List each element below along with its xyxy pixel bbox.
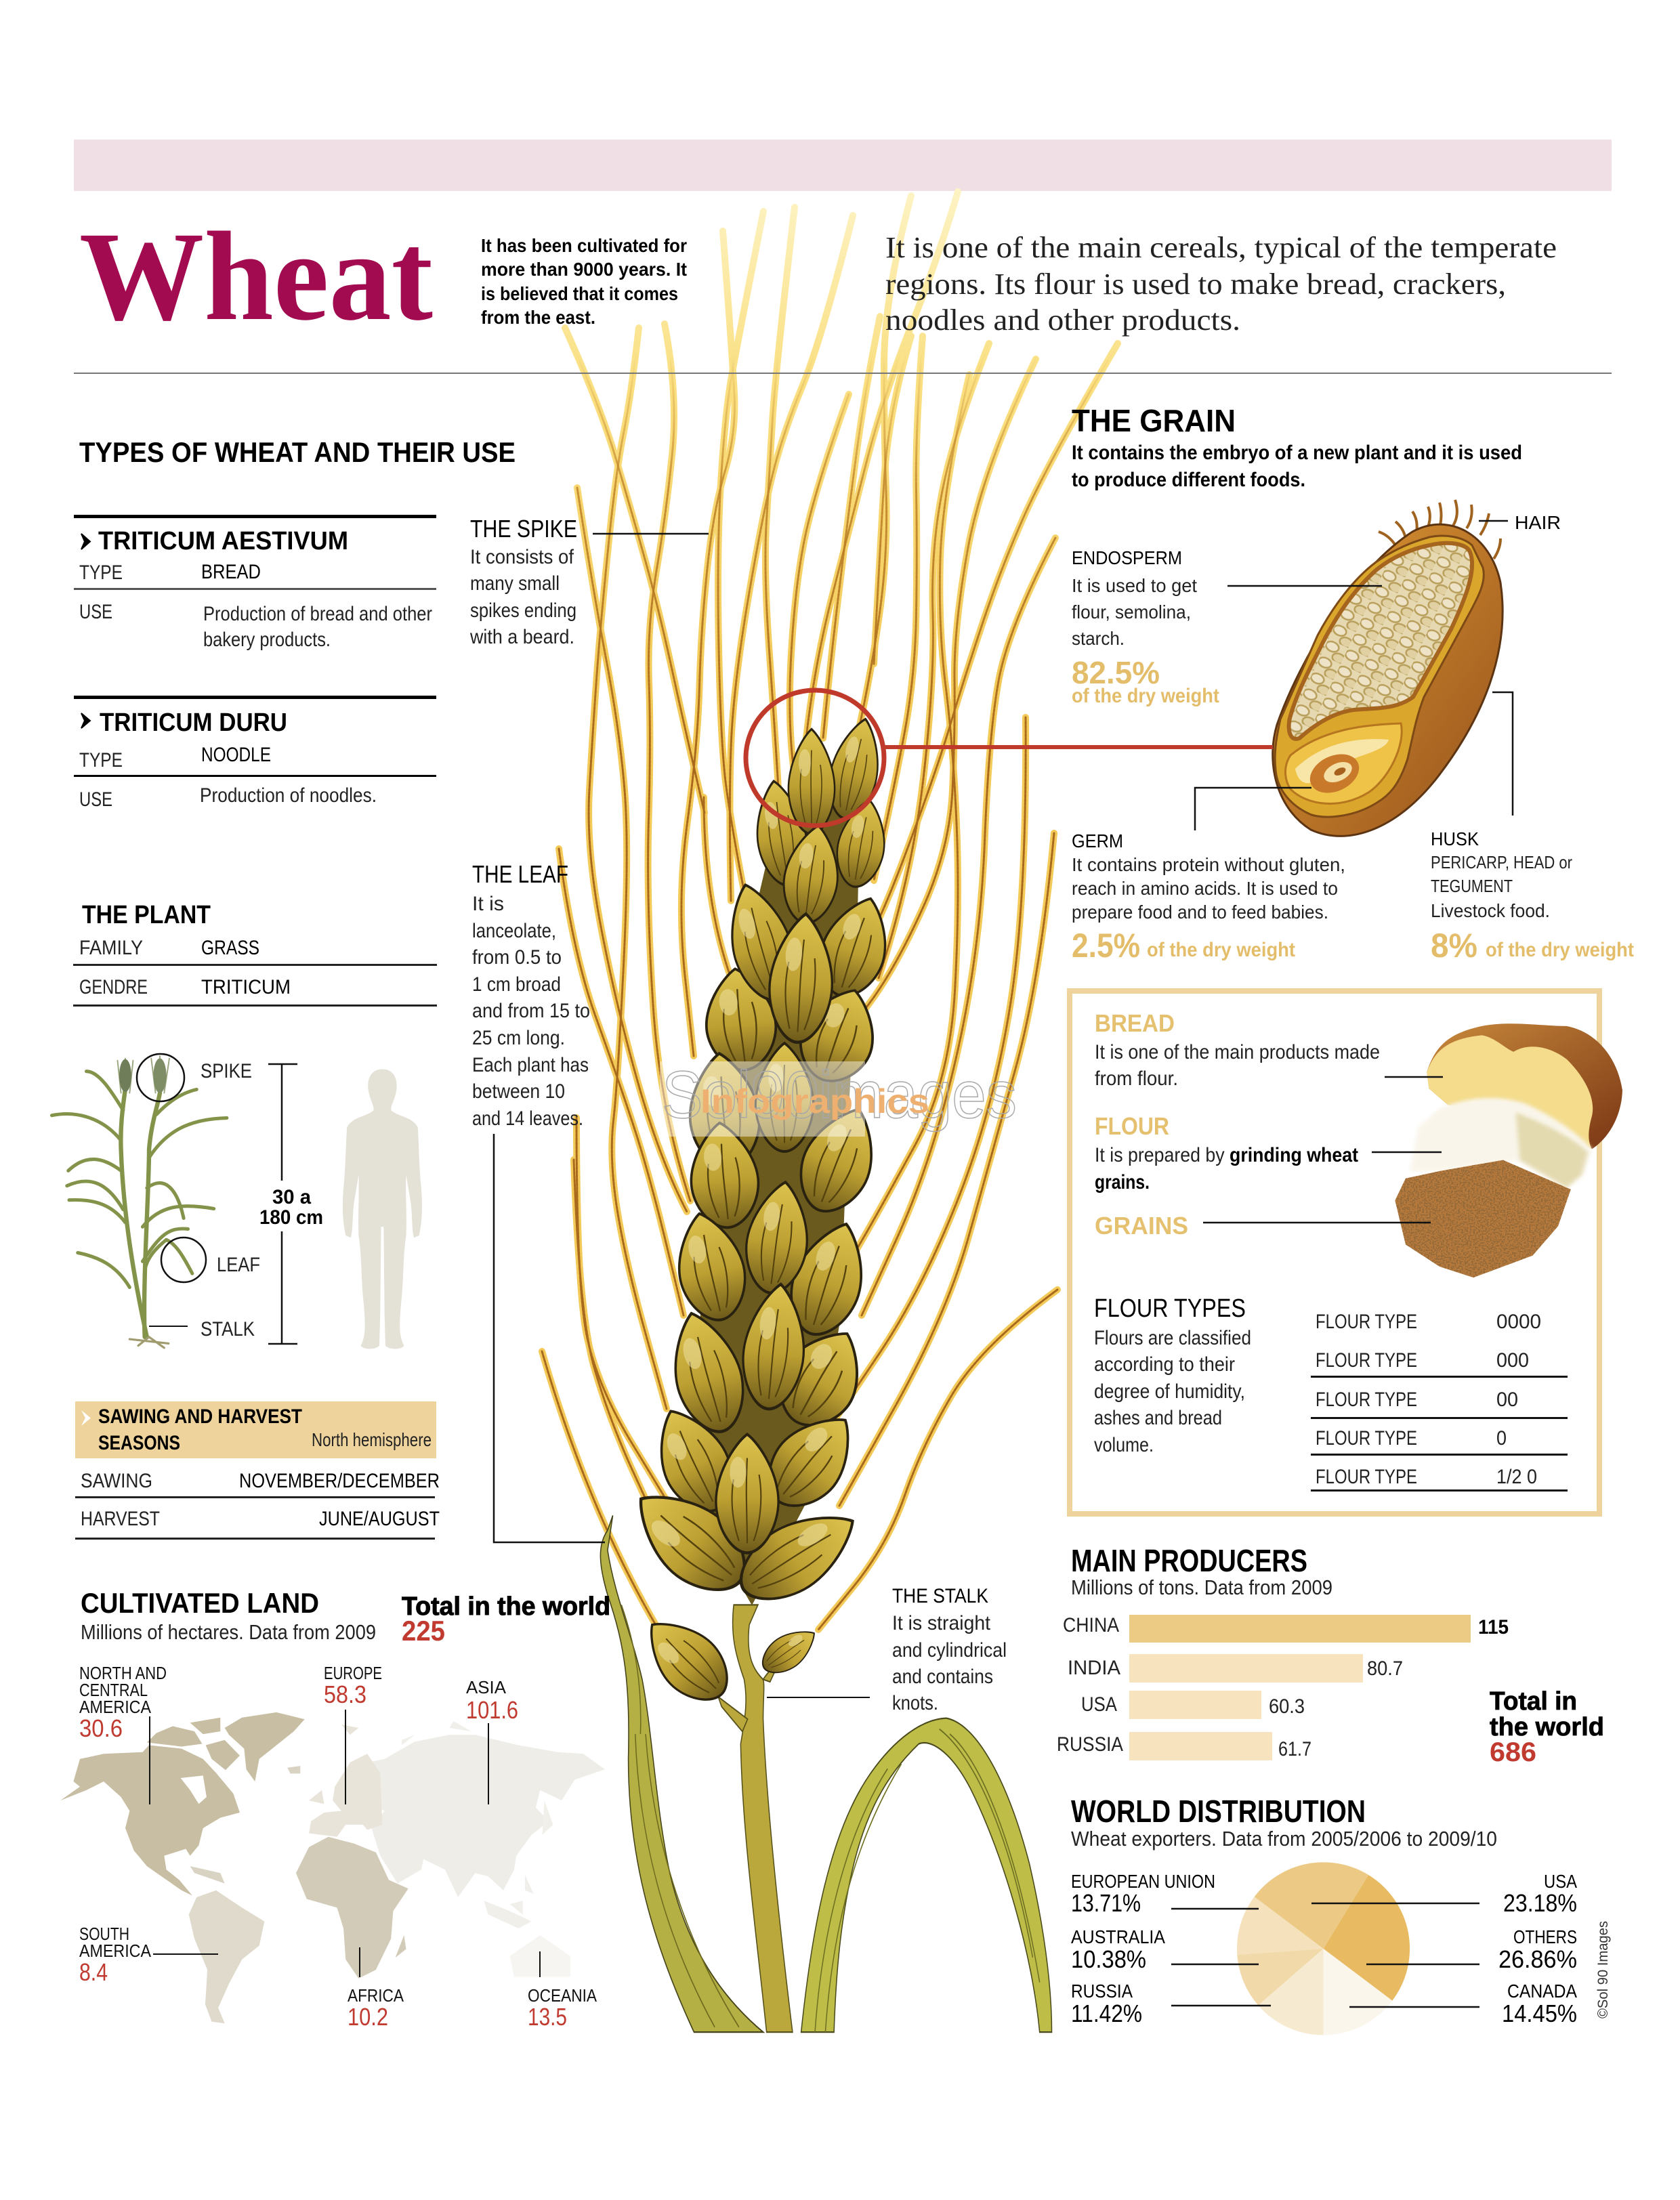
left leaf <box>600 1515 763 2032</box>
label: the spike: spikes ending <box>470 599 576 622</box>
stalk <box>718 1605 793 2032</box>
panel: types of wheat: Production of bread and other <box>203 603 432 625</box>
intro: description: regions. Its flour is used to make bread, crackers, <box>885 268 1506 301</box>
label: russia <box>1071 1981 1142 2027</box>
hair label <box>1479 512 1561 533</box>
total callout: 686 <box>1490 1737 1536 1767</box>
label: north america: NORTH AND <box>79 1663 167 1683</box>
label: the stalk: It is straight <box>892 1612 991 1634</box>
label: asia: ASIA <box>466 1677 507 1697</box>
panel: sawing and harvest seasons: SAWING <box>81 1470 152 1492</box>
panel: main producers <box>1057 1543 1604 1767</box>
husk label: Livestock food. <box>1431 900 1550 921</box>
germ label: GERM <box>1072 830 1123 851</box>
heading: THE PLANT <box>82 901 211 929</box>
intro: description: noodles and other products. <box>885 303 1240 337</box>
bread text <box>1095 1009 1443 1090</box>
label: the spike: THE SPIKE <box>470 515 577 543</box>
flour types text: ashes and bread <box>1094 1407 1222 1429</box>
flour types text: degree of humidity, <box>1094 1380 1245 1403</box>
panel: the plant: STALK <box>201 1318 255 1340</box>
label: europe: 58.3 <box>324 1680 366 1708</box>
flour types table: FLOUR TYPE <box>1316 1349 1417 1372</box>
label: the leaf <box>472 860 605 1542</box>
bar: usa: USA <box>1081 1693 1117 1716</box>
bread text: BREAD <box>1095 1009 1175 1037</box>
endosperm label: ENDOSPERM <box>1072 547 1182 568</box>
flour types table: FLOUR TYPE <box>1316 1466 1417 1488</box>
bread text: from flour. <box>1095 1067 1178 1090</box>
label: the stalk: THE STALK <box>892 1585 988 1607</box>
label: russia: 11.42% <box>1071 2000 1142 2027</box>
label: others: OTHERS <box>1513 1926 1577 1947</box>
label: europe <box>324 1663 382 1708</box>
panel: types of wheat: Production of noodles. <box>200 784 377 807</box>
panel: types of wheat: TYPE <box>79 749 123 771</box>
bar: russia <box>1057 1732 1311 1760</box>
label: asia <box>466 1677 518 1724</box>
panel: sawing and harvest seasons: JUNE/AUGUST <box>319 1508 440 1530</box>
label: africa: 10.2 <box>348 2003 388 2031</box>
label: the spike: It consists of <box>470 546 574 568</box>
germ label: 2.5% <box>1072 927 1140 965</box>
map leaders <box>150 1710 540 1977</box>
label: north america: 30.6 <box>79 1714 123 1742</box>
husk label: PERICARP, HEAD or <box>1431 852 1572 872</box>
panel: types of wheat: USE <box>79 788 112 811</box>
total callout: Total in the world <box>402 1592 610 1621</box>
total callout: the world <box>1490 1713 1604 1741</box>
label: russia: RUSSIA <box>1071 1981 1133 2002</box>
flour types table: 0000 <box>1496 1311 1541 1333</box>
grains text: GRAINS <box>1095 1212 1188 1240</box>
heading: CULTIVATED LAND <box>81 1587 319 1619</box>
panel: the plant: FAMILY <box>79 937 143 959</box>
label: africa: AFRICA <box>348 1985 404 2006</box>
watermark: Infographics <box>700 1082 929 1120</box>
panel: sawing and harvest seasons: NOVEMBER/DECEMBER <box>239 1470 440 1492</box>
bread text: It is one of the main products made <box>1095 1041 1380 1063</box>
label: others: 26.86% <box>1498 1945 1577 1973</box>
flour text: FLOUR <box>1095 1112 1169 1140</box>
bar: india: INDIA <box>1068 1657 1120 1679</box>
label: north america: AMERICA <box>79 1697 152 1717</box>
label: africa <box>348 1985 404 2031</box>
flour types table <box>1311 1311 1568 1492</box>
heading: MAIN PRODUCERS <box>1071 1543 1307 1578</box>
heading: WORLD DISTRIBUTION <box>1071 1794 1366 1829</box>
germ label: of the dry weight <box>1147 939 1295 961</box>
flour text <box>1095 1112 1442 1193</box>
panel: types of wheat: TYPE <box>79 562 123 584</box>
flour types table: 1/2 0 <box>1496 1466 1537 1488</box>
panel: world distribution <box>1071 1794 1577 2035</box>
world map <box>60 1712 605 2023</box>
panel: the grain: to produce different foods. <box>1072 469 1305 491</box>
endosperm label: of the dry weight <box>1072 685 1219 707</box>
label: the leaf: and from 15 to <box>472 1000 590 1022</box>
label: the spike: with a beard. <box>469 626 574 648</box>
total callout: 225 <box>402 1615 445 1647</box>
panel: the grain <box>1072 403 1634 965</box>
panel: sawing and harvest seasons: HARVEST <box>81 1508 160 1530</box>
intro: history: more than 9000 years. It <box>481 259 687 280</box>
flour text: It is prepared by grinding wheat <box>1095 1144 1358 1166</box>
label: the leaf: and 14 leaves. <box>472 1107 583 1130</box>
label: the leaf: 1 cm broad <box>472 973 561 996</box>
panel: types of wheat <box>74 436 516 811</box>
panel: the plant: GRASS <box>201 937 259 959</box>
label: the leaf: from 0.5 to <box>472 946 562 969</box>
bar: usa <box>1081 1691 1305 1719</box>
bar: russia: RUSSIA <box>1057 1733 1123 1756</box>
panel: types of wheat: USE <box>79 601 112 623</box>
panel: sawing and harvest seasons: SAWING AND HARVEST <box>98 1405 302 1428</box>
endosperm label: starch. <box>1072 628 1125 649</box>
right leaf <box>801 1718 1052 2032</box>
panel: world distribution: Wheat exporters. Data from 2005/2006 to 2009/10 <box>1071 1827 1497 1850</box>
height scale <box>259 1064 323 1344</box>
germ label: prepare food and to feed babies. <box>1072 902 1328 923</box>
endosperm label: 82.5% <box>1072 655 1160 690</box>
spikelets <box>618 715 900 1714</box>
label: north america <box>79 1663 167 1742</box>
panel: main producers: Millions of tons. Data from 2009 <box>1071 1575 1332 1599</box>
label: european union: 13.71% <box>1071 1889 1141 1917</box>
panel: types of wheat: bakery products. <box>203 629 331 651</box>
label: europe: EUROPE <box>324 1663 382 1683</box>
flour types table: 000 <box>1496 1349 1529 1372</box>
chevron <box>81 534 90 549</box>
panel: cultivated land <box>60 1587 610 2031</box>
title: Wheat <box>79 205 433 347</box>
label: the stalk <box>767 1585 1007 1714</box>
flour types text: according to their <box>1094 1353 1235 1376</box>
label: canada: CANADA <box>1507 1981 1577 2002</box>
label: oceania: 13.5 <box>528 2003 567 2031</box>
bar: china: CHINA <box>1063 1614 1119 1636</box>
panel: types of wheat: BREAD <box>201 561 261 583</box>
husk label: 8% <box>1431 927 1477 965</box>
flour types table: 00 <box>1496 1389 1518 1411</box>
label: usa <box>1503 1871 1577 1917</box>
label: oceania: OCEANIA <box>528 1985 597 2006</box>
panel: the plant: TRITICUM <box>201 976 291 998</box>
label: the leaf: between 10 <box>472 1080 565 1103</box>
flour text: grains. <box>1095 1171 1150 1193</box>
label: south america <box>79 1924 152 1986</box>
panel: types of wheat: NOODLE <box>201 744 271 766</box>
label: south america: AMERICA <box>79 1941 152 1961</box>
panel: the plant: GENDRE <box>79 976 148 998</box>
label: the leaf: lanceolate, <box>472 920 556 942</box>
awns <box>542 192 1118 1630</box>
bar: russia: 61.7 <box>1278 1738 1311 1760</box>
label: australia <box>1071 1926 1165 1973</box>
chevron <box>81 1410 91 1426</box>
label: south america: SOUTH <box>79 1924 129 1944</box>
label: the stalk: and contains <box>892 1666 993 1688</box>
label: canada: 14.45% <box>1502 2000 1577 2027</box>
spike body <box>698 779 860 1605</box>
panel: bread, flour, grains and flour types <box>1070 991 1622 1514</box>
triticum duru: TRITICUM DURU <box>100 708 287 737</box>
endosperm label: It is used to get <box>1072 575 1197 596</box>
food photo <box>1395 1023 1622 1277</box>
bar: china <box>1063 1614 1509 1643</box>
husk label <box>1431 692 1634 965</box>
flour types text <box>1094 1294 1251 1456</box>
pie chart <box>1237 1862 1410 2035</box>
grain illustration <box>1273 500 1503 836</box>
flour types table: 0 <box>1496 1427 1507 1450</box>
icon: plant drawing <box>52 1056 227 1348</box>
endosperm label: flour, semolina, <box>1072 601 1191 622</box>
panel: the grain: It contains the embryo of a new plant and it is used <box>1072 442 1522 464</box>
husk label: HUSK <box>1431 828 1479 849</box>
label: canada <box>1502 1981 1577 2027</box>
intro: history <box>481 235 687 328</box>
zoom callout: circle and line <box>746 690 1273 826</box>
panel: the plant: SPIKE <box>201 1060 252 1082</box>
label: the leaf: THE LEAF <box>472 860 568 888</box>
label: european union: EUROPEAN UNION <box>1071 1871 1215 1892</box>
heading: TYPES OF WHEAT AND THEIR USE <box>79 436 516 468</box>
label: asia: 101.6 <box>466 1696 518 1724</box>
hair label: HAIR <box>1515 512 1561 533</box>
intro: description <box>885 231 1557 337</box>
panel: the plant <box>52 901 437 1349</box>
label: south america: 8.4 <box>79 1958 108 1986</box>
flour types text: volume. <box>1094 1434 1154 1456</box>
panel: the plant: LEAF <box>217 1254 260 1276</box>
label: the spike: many small <box>470 572 560 595</box>
label: usa: 23.18% <box>1503 1889 1577 1917</box>
total callout <box>1490 1687 1604 1767</box>
label: the leaf: It is <box>472 893 504 915</box>
label: australia: AUSTRALIA <box>1071 1926 1165 1947</box>
total callout: Total in <box>1490 1687 1577 1716</box>
panel: cultivated land: Millions of hectares. Data from 2009 <box>81 1620 376 1644</box>
label: others <box>1498 1926 1577 1973</box>
label: the stalk: knots. <box>892 1692 938 1714</box>
flour types table: FLOUR TYPE <box>1316 1427 1417 1450</box>
germ label: reach in amino acids. It is used to <box>1072 878 1338 899</box>
watermark: Sol90images <box>662 1057 1017 1132</box>
flour types table: FLOUR TYPE <box>1316 1389 1417 1411</box>
bar: china: 115 <box>1478 1616 1509 1638</box>
label: european union <box>1071 1871 1215 1917</box>
label: oceania <box>528 1985 597 2031</box>
label: the leaf: 25 cm long. <box>472 1027 565 1049</box>
label: the spike <box>469 515 709 648</box>
panel: sawing and harvest seasons <box>75 1401 440 1540</box>
intro: history: from the east. <box>481 307 595 328</box>
label: the leaf: Each plant has <box>472 1054 589 1076</box>
germ label: It contains protein without gluten, <box>1072 854 1345 875</box>
bar: india <box>1068 1654 1403 1683</box>
panel: sawing and harvest seasons: SEASONS <box>98 1432 180 1454</box>
intro: history: is believed that it comes <box>481 283 678 304</box>
label: usa: USA <box>1544 1871 1577 1892</box>
intro: description: It is one of the main cereals, typical of the temperate <box>885 231 1557 264</box>
label: australia: 10.38% <box>1071 1945 1146 1973</box>
heading: THE GRAIN <box>1072 403 1236 438</box>
husk label: of the dry weight <box>1486 939 1634 961</box>
icon: human silhouette <box>343 1069 422 1349</box>
label: north america: CENTRAL <box>79 1680 148 1700</box>
total callout <box>402 1592 610 1647</box>
husk label: TEGUMENT <box>1431 876 1513 896</box>
flour types text: Flours are classified <box>1094 1327 1251 1349</box>
height scale: 180 cm <box>259 1206 323 1229</box>
header band <box>74 140 1612 191</box>
germ label <box>1072 788 1345 965</box>
label: the stalk: and cylindrical <box>892 1639 1007 1662</box>
height scale: 30 a <box>272 1186 311 1208</box>
triticum aestivum: TRITICUM AESTIVUM <box>98 527 348 555</box>
flour types text: FLOUR TYPES <box>1094 1294 1246 1323</box>
bar: india: 80.7 <box>1367 1657 1403 1680</box>
credit: ©Sol 90 Images <box>1595 1921 1611 2018</box>
bar: usa: 60.3 <box>1269 1695 1305 1718</box>
endosperm label <box>1072 547 1382 707</box>
flour types table: FLOUR TYPE <box>1316 1311 1417 1333</box>
panel: sawing and harvest seasons: North hemisphere <box>312 1429 432 1450</box>
wheat illustration <box>542 192 1118 2032</box>
chevron <box>81 713 90 728</box>
intro: history: It has been cultivated for <box>481 235 687 256</box>
